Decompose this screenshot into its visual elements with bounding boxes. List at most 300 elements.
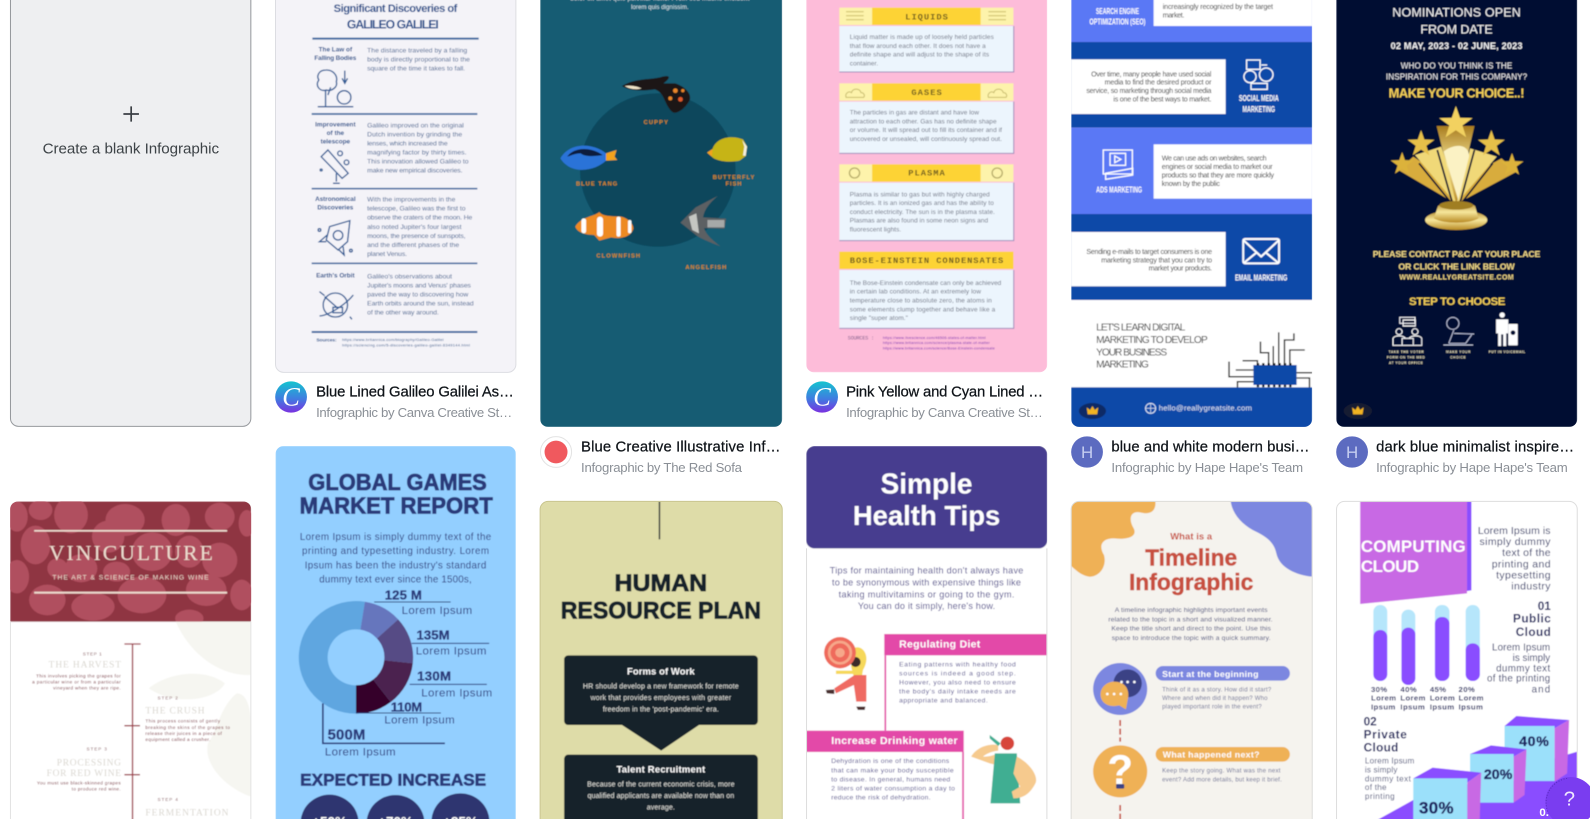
panel: timeline infographic template: Timeline	[1145, 544, 1237, 570]
section: social media marketing	[1071, 59, 1279, 114]
template title: Pink Yellow and Cyan Lined …	[846, 385, 1043, 401]
bar chart: 20%	[1459, 685, 1475, 694]
section: SEO	[1089, 0, 1312, 27]
help button: ?	[1564, 789, 1575, 811]
template author: Infographic by Hape Hape's Team	[1111, 460, 1303, 475]
panel: Galileo Galilei template: moons, the presence of sunspots,	[367, 233, 466, 240]
panel: Galileo Galilei template: paved the way to discovering how	[367, 292, 468, 299]
section: SEO: market.	[1163, 12, 1184, 19]
panel: simple health tips template: taking multivitamins or going to the gym.	[839, 589, 1014, 599]
panel: nominations template: MAKE YOUR	[1446, 350, 1471, 354]
panel: nominations template: OR CLICK THE LINK BELOW	[1398, 261, 1515, 271]
step 2: This process consists of gently	[145, 719, 221, 724]
event 2: event? Add more details, but keep it brief.	[1162, 777, 1282, 783]
step 1: This involves picking the grapes for	[36, 673, 121, 678]
icon: envelope	[1243, 239, 1279, 263]
step 2: release their juices in a piece of	[145, 731, 222, 736]
icon: Canva avatar	[275, 381, 307, 413]
chart labels: 135M	[416, 628, 450, 643]
section: social media marketing: media to find the desired product or	[1105, 80, 1212, 87]
title banner: COMPUTING	[1361, 537, 1466, 556]
panel: Galileo Galilei template: of the	[327, 130, 345, 137]
section: private cloud	[1364, 715, 1415, 801]
bar chart: Ipsum	[1371, 702, 1395, 711]
step 4: FERMENTATION	[145, 809, 229, 819]
panel: simple health tips template: Health Tips	[853, 499, 1000, 531]
panel: Galileo Galilei template: Earth orbits around the sun, instead	[367, 300, 474, 307]
bar chart: Lorem	[1400, 694, 1426, 703]
step 3	[37, 747, 121, 792]
section: Bose-Einstein condensates: BOSE-EINSTEIN CONDENSATES	[850, 256, 1003, 266]
cube 20%: 20%	[1484, 766, 1513, 782]
icon: tree and apple	[317, 70, 353, 107]
panel: fish infographic template: lorem quis dignissim.	[631, 5, 689, 11]
chart labels: 110M	[391, 699, 422, 714]
panel: nominations template: WWW.REALLYGREATSITE.COM	[1399, 274, 1514, 281]
section: private cloud: dummy text	[1365, 774, 1412, 783]
icon: circuit chip	[1229, 332, 1312, 387]
template title: dark blue minimalist inspire…	[1376, 440, 1574, 456]
section: closing message	[1096, 323, 1312, 387]
section: public cloud: Public	[1513, 613, 1551, 626]
section: regulating diet: the body's daily intake needs are	[899, 689, 1016, 696]
chart labels: Lorem Ipsum	[402, 605, 472, 617]
section: closing message: LET'S LEARN DIGITAL	[1096, 323, 1186, 334]
section: plasma: conduct electricity. The sun is in the plasma state.	[850, 209, 995, 216]
diagram circle	[580, 93, 736, 247]
bar chart: Lorem	[1371, 694, 1396, 703]
box: talent recruitment: Because of the current economic crisis, more	[587, 782, 735, 789]
section: ads marketing: We can use ads on websites, search	[1162, 156, 1267, 163]
section: Bose-Einstein condensates: temperature close to absolute zero, the atoms in	[850, 297, 992, 304]
panel: Galileo Galilei template: body is directly proportional to the	[367, 56, 470, 63]
header with grapes	[10, 501, 252, 622]
section: SEO: OPTIMIZATION (SEO)	[1089, 17, 1146, 27]
bar chart: Lorem	[1459, 694, 1484, 703]
box: forms of work: work that provides employees with greater	[590, 695, 732, 702]
icon: Hape avatar	[1071, 436, 1103, 468]
panel: fish infographic template: BUTTERFLY	[713, 175, 755, 181]
panel: Galileo Galilei template: observe the craters of the moon. He	[367, 215, 473, 222]
panel: Galileo Galilei template: telescope	[321, 139, 351, 146]
panel: Galileo Galilei template: The Law of	[319, 46, 353, 53]
section: increase drinking water: reduce the risk of dehydration.	[831, 794, 931, 801]
caption: fish template	[540, 437, 781, 475]
section: plasma: Plasmas are also found in some neon signs and	[850, 218, 989, 225]
section: public cloud: is simply	[1513, 653, 1550, 664]
panel: computing cloud template: Lorem Ipsum is	[1478, 526, 1551, 537]
panel: Galileo Galilei template: Galileo's observations about	[367, 273, 452, 280]
panel: Galileo Galilei template: Improvement	[315, 122, 357, 129]
icon: telescope	[320, 150, 349, 183]
section: Bose-Einstein condensates: single "super atom."	[850, 315, 908, 322]
section: ads marketing: products so that they are more quickly	[1162, 172, 1274, 179]
panel: Galileo Galilei template: make new empirical discoveries.	[367, 167, 463, 174]
footer: hello@reallygreatsite.com	[1159, 404, 1252, 413]
panel: global games market report template	[276, 446, 516, 819]
panel: Galileo Galilei template: Astronomical	[315, 196, 356, 203]
panel: Galileo Galilei template: Earth's Orbit	[316, 272, 356, 279]
icon: ads video	[1103, 150, 1133, 179]
chart labels: Lorem Ipsum	[384, 715, 455, 727]
template title: Blue Creative Illustrative Inf…	[581, 440, 781, 456]
section: ads marketing: ADS MARKETING	[1096, 184, 1142, 194]
header with grapes: VINICULTURE	[49, 541, 213, 565]
section: increase drinking water: Increase Drinking water	[831, 736, 958, 747]
bar chart: 40%	[1400, 685, 1417, 694]
template title: Blue Lined Galileo Galilei As…	[316, 385, 514, 401]
panel: global games market report template: MARKET REPORT	[300, 492, 493, 518]
chart labels: Lorem Ipsum	[325, 747, 396, 759]
icon: Hape avatar	[1336, 436, 1368, 468]
section: plasma: PLASMA	[908, 169, 946, 179]
header with grapes: THE ART & SCIENCE OF MAKING WINE	[52, 574, 209, 581]
illustration: man drinking water	[971, 735, 1036, 803]
panel: Galileo Galilei template: magnifying factor by thirty times.	[367, 149, 467, 156]
cube 20%	[1470, 745, 1527, 803]
section: plasma: fluorescent lights.	[850, 226, 901, 233]
section: liquids: that flow around each other. It does not have a	[850, 43, 986, 50]
footer	[1079, 403, 1252, 419]
bar chart: 30%	[1371, 685, 1387, 694]
panel: nominations template	[1336, 0, 1577, 427]
section: private cloud: 02	[1364, 715, 1377, 728]
panel: create a blank infographic	[10, 0, 251, 426]
panel: Galileo Galilei template: telescope, Galileo was the first to	[367, 206, 466, 213]
title banner: CLOUD	[1361, 557, 1419, 576]
section: private cloud: is simply	[1365, 766, 1397, 775]
help button	[1539, 777, 1590, 819]
section: Bose-Einstein condensates: The Bose-Einstein condensate can only be achieved	[850, 280, 1002, 287]
template author: Infographic by Canva Creative St…	[846, 405, 1043, 420]
box: forms of work	[564, 655, 758, 751]
panel: nominations template: AT YOUR OFFICE	[1389, 361, 1424, 365]
bar chart	[1371, 605, 1484, 711]
chart labels	[323, 587, 492, 759]
section: social media marketing: SOCIAL MEDIA	[1239, 93, 1279, 103]
icon: plus	[123, 106, 139, 122]
icon: blue tang	[560, 146, 617, 170]
bar chart: 45%	[1430, 685, 1446, 694]
panel: computing cloud template: typesetting	[1496, 570, 1551, 581]
panel: simple health tips template: Simple	[881, 469, 973, 500]
step 3: FOR RED WINE	[47, 769, 121, 779]
step 3: STEP 3	[87, 747, 107, 752]
panel: nominations template: INSPIRATION FOR THIS COMPANY?	[1386, 72, 1528, 81]
section: email marketing: Sending e-mails to target consumers is one	[1086, 249, 1212, 256]
expected increase circles	[301, 793, 490, 819]
illustration: person carrying tomato	[824, 637, 866, 710]
donut chart	[299, 601, 413, 714]
event 2: What happened next?	[1163, 750, 1259, 760]
icon: Hape avatar: H	[1081, 443, 1093, 462]
section: gases: or volume. It will spread out to fill its container and if	[850, 127, 1002, 134]
section: increase drinking water: that can make your body susceptible	[831, 767, 954, 774]
section: liquids: definite shape and will adjust to the shape of its	[850, 52, 989, 59]
label: create a blank infographic: Create a blank Infographic	[43, 141, 220, 158]
icon: earth orbit	[319, 292, 353, 319]
panel: Galileo Galilei template: Sources:	[316, 337, 337, 342]
step 1	[32, 651, 121, 690]
panel: global games market report template: Lorem Ipsum is simply dummy text of the	[300, 532, 491, 543]
section: email marketing: marketing strategy that you can try to	[1101, 257, 1212, 264]
panel: Galileo Galilei template: Discoveries	[317, 204, 354, 211]
panel: human resource plan template: RESOURCE PLAN	[561, 597, 761, 624]
panel: timeline infographic template: space to introduce the topic with a quick summary.	[1112, 635, 1271, 642]
panel: nominations template: STEP TO CHOOSE	[1409, 296, 1506, 308]
section: private cloud: Cloud	[1364, 742, 1398, 755]
icon: voter form	[1393, 317, 1422, 345]
icon: rocket	[318, 221, 352, 255]
chart labels: Lorem Ipsum	[421, 687, 492, 699]
section: social media marketing: service, so marketing through social media	[1086, 88, 1212, 95]
section: public cloud	[1487, 600, 1551, 695]
panel: nominations template: PLEASE CONTACT P&C AT YOUR PLACE	[1373, 249, 1541, 259]
panel: simple health tips template: You can do it simply, here's how.	[858, 601, 995, 611]
section: public cloud: of the printing	[1487, 674, 1550, 685]
panel: viniculture template	[5, 497, 255, 819]
panel: Galileo Galilei template: The distance traveled by a falling	[367, 47, 467, 54]
panel: Galileo Galilei template: This innovation allowed Galileo to	[367, 158, 469, 165]
section: ads marketing: engines or social media to market our	[1162, 164, 1273, 171]
section: closing message: MARKETING TO DEVELOP	[1096, 335, 1208, 346]
panel: Galileo Galilei template: Galileo improved on the original	[367, 122, 464, 129]
cube 30%: 30%	[1419, 798, 1454, 817]
section: ads marketing	[1096, 144, 1312, 199]
box: forms of work: HR should develop a new framework for remote	[583, 684, 739, 691]
panel: nominations template: TAKE THE VOTER	[1389, 350, 1424, 354]
section: plasma: Plasma is similar to gas but with highly charged	[850, 191, 990, 198]
section: regulating diet: However, you also need to ensure	[899, 680, 1016, 687]
panel: global games market report template: GLOBAL GAMES	[308, 469, 487, 495]
panel: fish infographic template: ANGELFISH	[685, 265, 726, 271]
cube 40%: 40%	[1519, 733, 1549, 749]
title banner	[1360, 501, 1471, 604]
section: gases: attraction to each other. Gas has no definite shape	[850, 118, 997, 125]
caption: states of matter template	[806, 381, 1043, 420]
panel: states of matter template: https://www.britannica.com/science/plasma-state-of-matter	[883, 341, 991, 345]
section: public cloud: dummy text	[1496, 663, 1550, 674]
panel: states of matter template: https://www.livescience.com/46506-states-of-matter.html	[883, 336, 986, 340]
section: regulating diet: sources is indeed a good step.	[899, 671, 1016, 678]
section: closing message: YOUR BUSINESS	[1096, 347, 1167, 358]
panel: global games market report template: Ipsum has been the industry's standard	[305, 560, 486, 571]
section: ads marketing: known by the public	[1162, 181, 1220, 188]
panel: Galileo Galilei template: Dutch invention by grinding the	[367, 131, 462, 138]
panel: simple health tips template	[806, 446, 1047, 819]
section: public cloud: Cloud	[1516, 626, 1551, 639]
panel: nominations template: CHOICE	[1450, 356, 1466, 360]
panel: timeline infographic template: A timeline infographic highlights important events	[1115, 607, 1268, 614]
panel: nominations template: FROM DATE	[1420, 23, 1493, 37]
panel: timeline infographic template: related to the topic in a short and visualized manner.	[1108, 616, 1273, 623]
panel: states of matter template: https://www.britannica.com/science/Bose-Einstein-condensate	[883, 346, 995, 350]
step 3: You must use black-skinned grapes	[37, 781, 121, 786]
section: Bose-Einstein condensates: in certain lab conditions. At an extremely low	[850, 289, 981, 296]
timeline axis	[124, 644, 141, 819]
panel: Galileo Galilei template: and the different phases of the	[367, 242, 459, 249]
panel: nominations template: FORM ON THE MED	[1387, 356, 1425, 360]
section: social media marketing: Over time, many people have used social	[1091, 71, 1212, 78]
chart labels: 125 M	[385, 587, 422, 602]
panel: Galileo Galilei template	[276, 0, 516, 372]
event 1: Where and when did it happen? Who	[1162, 696, 1268, 702]
section: private cloud: Private	[1364, 729, 1407, 742]
icon: gold trophy	[1391, 106, 1524, 230]
step 2: THE CRUSH	[145, 706, 205, 716]
icon: social media	[1244, 60, 1273, 89]
panel: Galileo Galilei template: GALILEO GALILEI	[347, 17, 439, 31]
icon: Canva avatar: C	[282, 383, 300, 412]
section: liquids: Liquid matter is made up of loosely held particles	[850, 34, 994, 41]
panel: fish infographic template: CLOWNFISH	[596, 253, 640, 259]
panel: states of matter template: SOURCES :	[848, 335, 874, 341]
panel: fish infographic template: CUPPY	[644, 120, 668, 126]
panel: timeline infographic template: Keep the title short and direct to the point. Use this	[1111, 626, 1272, 633]
step 4	[145, 797, 229, 819]
event 1: Start at the beginning	[1162, 669, 1258, 679]
icon: Red Sofa avatar	[540, 437, 572, 467]
section: gases: GASES	[911, 88, 942, 98]
panel: states of matter template	[806, 0, 1047, 372]
caption: Galileo template	[275, 381, 514, 420]
event 1: played important role in the event?	[1162, 705, 1262, 711]
section: increase drinking water: to disease. In general, humans need	[831, 776, 950, 783]
section: increase drinking water: Dehydration is one of the conditions	[831, 758, 950, 765]
panel: fish infographic template	[540, 0, 782, 427]
panel: global games market report template: dummy text ever since the 1500s,	[319, 575, 472, 586]
panel: global games market report template: EXPECTED INCREASE	[300, 771, 486, 789]
icon: voting box	[1496, 312, 1518, 346]
icon: Hape avatar: H	[1346, 443, 1358, 462]
section: email marketing: EMAIL MARKETING	[1235, 273, 1287, 283]
section: regulating diet: Regulating Diet	[899, 640, 981, 651]
bar chart: Lorem	[1430, 694, 1455, 703]
section: Bose-Einstein condensates: some elements clump together and behave like a	[850, 306, 996, 313]
section: increase drinking water: 2 liters of water consumption a day to	[831, 785, 955, 792]
icon: question mark	[1093, 745, 1147, 797]
section: private cloud: printing	[1365, 792, 1395, 801]
box: talent recruitment	[564, 755, 758, 819]
step 4: STEP 4	[158, 797, 178, 802]
panel: Galileo Galilei template: of the other way around.	[367, 309, 439, 316]
chart labels: 500M	[328, 727, 365, 743]
decorative blobs	[1071, 501, 1155, 577]
section: gases: uncovered or unsealed, will continuously spread out.	[850, 136, 1002, 143]
step 2: breaking the skins of the grapes to	[145, 725, 230, 730]
step 1: THE HARVEST	[49, 661, 121, 671]
step 3: to produce red wine.	[72, 787, 121, 792]
section: social media marketing: MARKETING	[1243, 104, 1275, 114]
section: SEO: SEARCH ENGINE	[1096, 6, 1139, 16]
panel: Galileo Galilei template: https://www.britannica.com/biography/Galileo-Galilei	[342, 337, 444, 342]
section: gases: The particles in gas are distant and have low	[850, 109, 979, 116]
section: private cloud: of the	[1365, 783, 1387, 792]
box: talent recruitment: average.	[647, 804, 675, 811]
box: forms of work: freedom in the 'post-pandemic' era.	[603, 706, 719, 713]
step 1: vineyard when they are ripe.	[53, 685, 121, 690]
panel: human resource plan template	[540, 501, 782, 819]
panel: simple health tips template: Tips for maintaining health don't always have	[830, 565, 1023, 575]
caption: nominations template	[1336, 436, 1574, 475]
section: closing message: MARKETING	[1096, 360, 1149, 371]
step 2	[145, 696, 230, 742]
panel: Galileo Galilei template: also noted Jupiter's four largest	[367, 224, 462, 231]
section: regulating diet: Eating patterns with healthy food	[899, 662, 1016, 669]
panel: Galileo Galilei template: Falling Bodies	[314, 55, 357, 62]
panel: nominations template: PUT IN VOICEMAIL	[1489, 350, 1525, 354]
icon: clownfish	[575, 212, 633, 241]
event 1: Think of it as a story. How did it start?	[1162, 687, 1272, 693]
section: liquids	[839, 8, 1014, 72]
chart labels: 130M	[417, 669, 451, 684]
section: gases	[839, 83, 1014, 153]
panel: computing cloud template: printing and	[1492, 559, 1551, 570]
section: regulating diet	[884, 634, 1047, 731]
section: public cloud: Lorem Ipsum	[1492, 643, 1550, 654]
box: talent recruitment: Talent Recruitment	[617, 764, 705, 775]
box: forms of work: Forms of Work	[627, 665, 695, 676]
template author: Infographic by Hape Hape's Team	[1376, 460, 1568, 475]
icon: Canva avatar: C	[813, 383, 831, 412]
panel: Galileo Galilei template: Significant Discoveries of	[334, 3, 458, 15]
section: Bose-Einstein condensates	[839, 252, 1014, 328]
section: plasma	[839, 164, 1014, 241]
panel: Galileo Galilei template: lenses, which increased the	[367, 140, 448, 147]
icon: speech bubbles	[1093, 663, 1147, 715]
panel: Galileo Galilei template: square of the time it takes to fall.	[367, 65, 465, 72]
section: liquids: container.	[850, 61, 878, 68]
icon: angelfish	[680, 196, 726, 247]
section: email marketing: market your products.	[1149, 266, 1212, 273]
section: public cloud: and	[1532, 684, 1550, 695]
icon: question mark: ?	[1107, 746, 1133, 793]
bar chart: Ipsum	[1459, 702, 1483, 711]
section: public cloud: 01	[1538, 600, 1551, 613]
icon: Canva avatar	[806, 381, 838, 413]
section: social media marketing: is one of the best ways to market.	[1113, 96, 1211, 103]
panel: computing cloud template: industry	[1511, 581, 1551, 592]
panel: computing cloud template: simply dummy	[1480, 537, 1551, 548]
section: email marketing	[1071, 232, 1287, 286]
panel: nominations template: WHO DO YOU THINK IS THE	[1401, 61, 1513, 70]
step 2: STEP 2	[158, 696, 178, 701]
section: liquids: LIQUIDS	[905, 12, 948, 22]
caption: marketing template	[1071, 436, 1309, 475]
template title: blue and white modern busi…	[1111, 440, 1309, 456]
icon: butterflyfish	[707, 137, 747, 162]
panel: timeline infographic template: Infographic	[1129, 569, 1253, 595]
panel: nominations template: 02 MAY, 2023 - 02 JUNE, 2023	[1391, 41, 1522, 51]
section: plasma: particles. It is an ionized gas and has the ability to	[850, 200, 994, 207]
step 3: PROCESSING	[57, 758, 121, 768]
template author: Infographic by Canva Creative St…	[316, 405, 512, 420]
icon: premium crown	[1344, 403, 1372, 419]
event 1	[1156, 666, 1290, 711]
template author: Infographic by The Red Sofa	[581, 460, 743, 475]
panel: fish infographic template: BLUE TANG	[576, 182, 618, 188]
panel: simple health tips template: to be synonymous with expensive things like	[832, 577, 1021, 587]
step 1: STEP 1	[83, 651, 102, 656]
icon: guppy fish	[622, 76, 690, 113]
cube 30%	[1413, 768, 1481, 819]
floor	[1351, 752, 1577, 819]
box: talent recruitment: qualified applicants are available now than on	[587, 793, 734, 800]
cube 40%	[1505, 716, 1569, 782]
background leaves	[149, 622, 252, 797]
help button: 0.	[1539, 807, 1549, 819]
step 1: a particular wine or from a particular	[32, 679, 121, 684]
